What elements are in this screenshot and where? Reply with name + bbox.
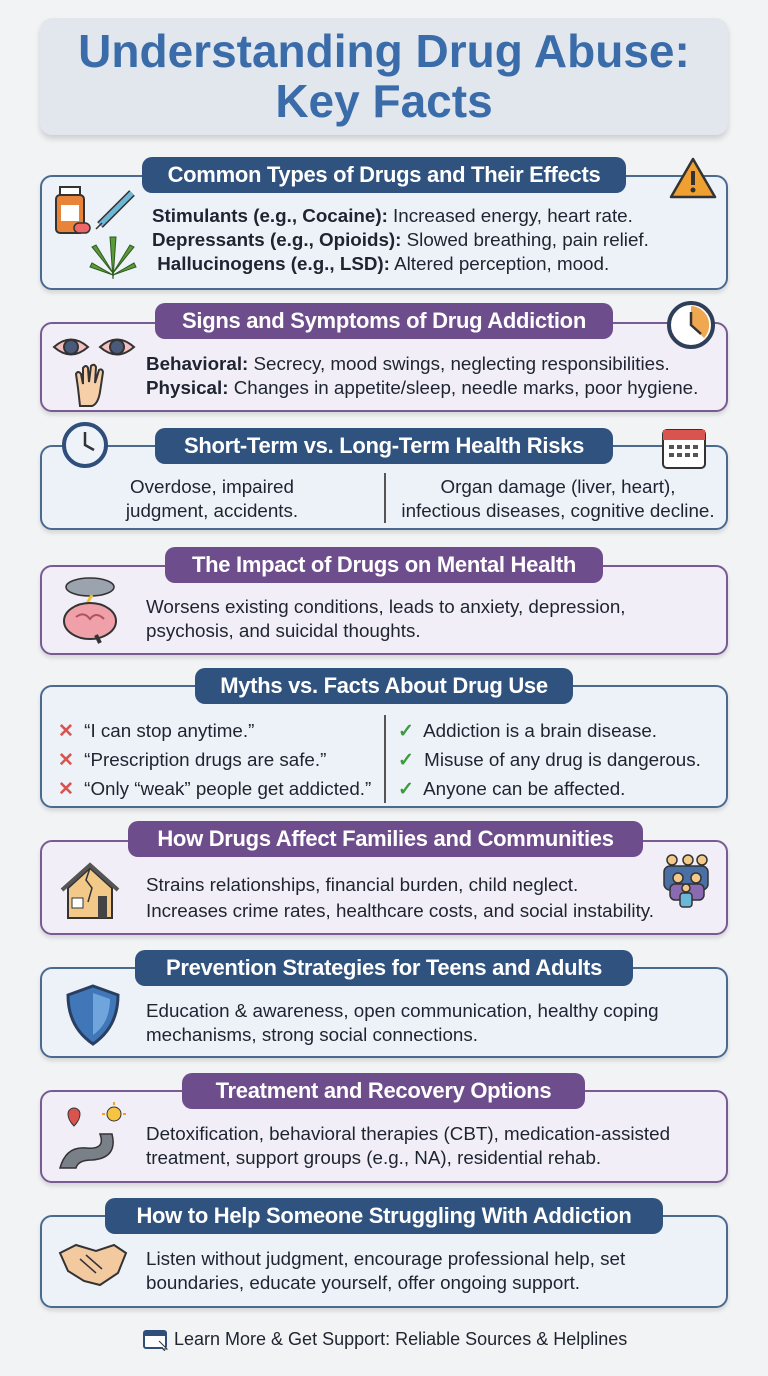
icon: cannabis leaf [89,236,137,279]
heading: prevention: Prevention Strategies for Teens and Adults [166,955,602,980]
title: Key Facts [275,75,493,127]
text: mental health: psychosis, and suicidal thoughts. [146,620,421,641]
list: facts: ✓ Anyone can be affected. [398,778,625,799]
heading: health risks: Short-Term vs. Long-Term Health Risks [184,433,584,458]
text: short term: Overdose, impaired [130,476,294,497]
heading: drug types: Common Types of Drugs and Their Effects [168,162,600,187]
text: long term [401,476,715,521]
text: signs: Physical: Changes in appetite/sleep, needle marks, poor hygiene. [146,377,698,398]
icon: road with sun [59,1102,126,1169]
text: how to help [146,1248,626,1293]
heading: myths: Myths vs. Facts About Drug Use [220,673,548,698]
heading: myths [195,668,573,704]
icon: eyes [52,338,136,356]
text: long term: infectious diseases, cognitive decline. [401,500,715,521]
heading: prevention [135,950,633,986]
heading: health risks [155,428,613,464]
text: families: Strains relationships, financial burden, child neglect. [146,874,578,895]
text: prevention: mechanisms, strong social connections. [146,1024,478,1045]
icon: warning [670,158,716,198]
heading: drug types [142,157,626,193]
footer: Learn More & Get Support: Reliable Sources & Helplines [174,1329,627,1349]
panel: prevention [40,967,728,1058]
list: facts [398,720,701,799]
text: treatment: Detoxification, behavioral therapies (CBT), medication-assisted [146,1123,670,1144]
list: myths: ✕ “I can stop anytime.” [58,720,254,741]
panel: signs [40,322,728,412]
text: signs: Behavioral: Secrecy, mood swings, neglecting responsibilities. [146,353,670,374]
text: long term: Organ damage (liver, heart), [441,476,675,497]
icon: calendar [662,429,706,469]
panel: how to help [40,1215,728,1308]
text: prevention [146,1000,659,1045]
title: Understanding Drug Abuse: [78,25,690,77]
panel: treatment [40,1090,728,1183]
icon: brain with cloud [63,577,117,644]
text: treatment [146,1123,670,1168]
list: myths: ✕ “Only “weak” people get addicted.” [58,778,371,799]
heading: mental health [165,547,603,583]
text: families [146,874,654,921]
panel: myths vs facts [40,685,728,808]
panel: health risks [40,445,728,530]
text: treatment: treatment, support groups (e.g., NA), residential rehab. [146,1147,601,1168]
list: facts: ✓ Addiction is a brain disease. [398,720,657,741]
text: how to help: Listen without judgment, encourage professional help, set [146,1248,625,1269]
text: families: Increases crime rates, healthcare costs, and social instability. [146,900,654,921]
icon: stopwatch [62,422,108,468]
heading: how to help [105,1198,663,1234]
icon: hand [75,364,104,407]
text: drug types [152,205,649,274]
text: drug types: Depressants (e.g., Opioids): Slowed breathing, pain relief. [152,229,649,250]
text: mental health [146,596,626,641]
icon: syringe [96,190,135,230]
icon: pill bottle [55,186,91,234]
icon: clock [667,301,715,349]
icon: browser [143,1330,168,1351]
text: short term: judgment, accidents. [126,500,298,521]
heading: mental health: The Impact of Drugs on Mental Health [192,552,576,577]
icon: people group [663,854,709,908]
heading: treatment: Treatment and Recovery Options [216,1078,551,1103]
panel: families [40,840,728,935]
heading: signs: Signs and Symptoms of Drug Addiction [182,308,586,333]
heading: families [128,821,643,857]
list: myths [58,720,371,799]
heading: signs [155,303,613,339]
text: prevention: Education & awareness, open communication, healthy coping [146,1000,659,1021]
panel: drug types [40,175,728,290]
text: drug types: Stimulants (e.g., Cocaine): Increased energy, heart rate. [152,205,633,226]
list: facts: ✓ Misuse of any drug is dangerous. [398,749,701,770]
icon: broken house [60,862,120,919]
heading: treatment [182,1073,585,1109]
panel: mental health [40,565,728,655]
heading: families: How Drugs Affect Families and Communities [157,826,614,851]
text: signs [146,353,698,398]
title [40,18,728,135]
text: mental health: Worsens existing conditions, leads to anxiety, depression, [146,596,626,617]
text: short term [125,476,298,521]
heading: how to help: How to Help Someone Struggling With Addiction [136,1203,632,1228]
list: myths: ✕ “Prescription drugs are safe.” [58,749,326,770]
icon: shield [66,984,120,1046]
icon: handshake [58,1244,128,1286]
text: drug types: Hallucinogens (e.g., LSD): Altered perception, mood. [157,253,609,274]
text: how to help: boundaries, educate yourself, offer ongoing support. [146,1272,580,1293]
